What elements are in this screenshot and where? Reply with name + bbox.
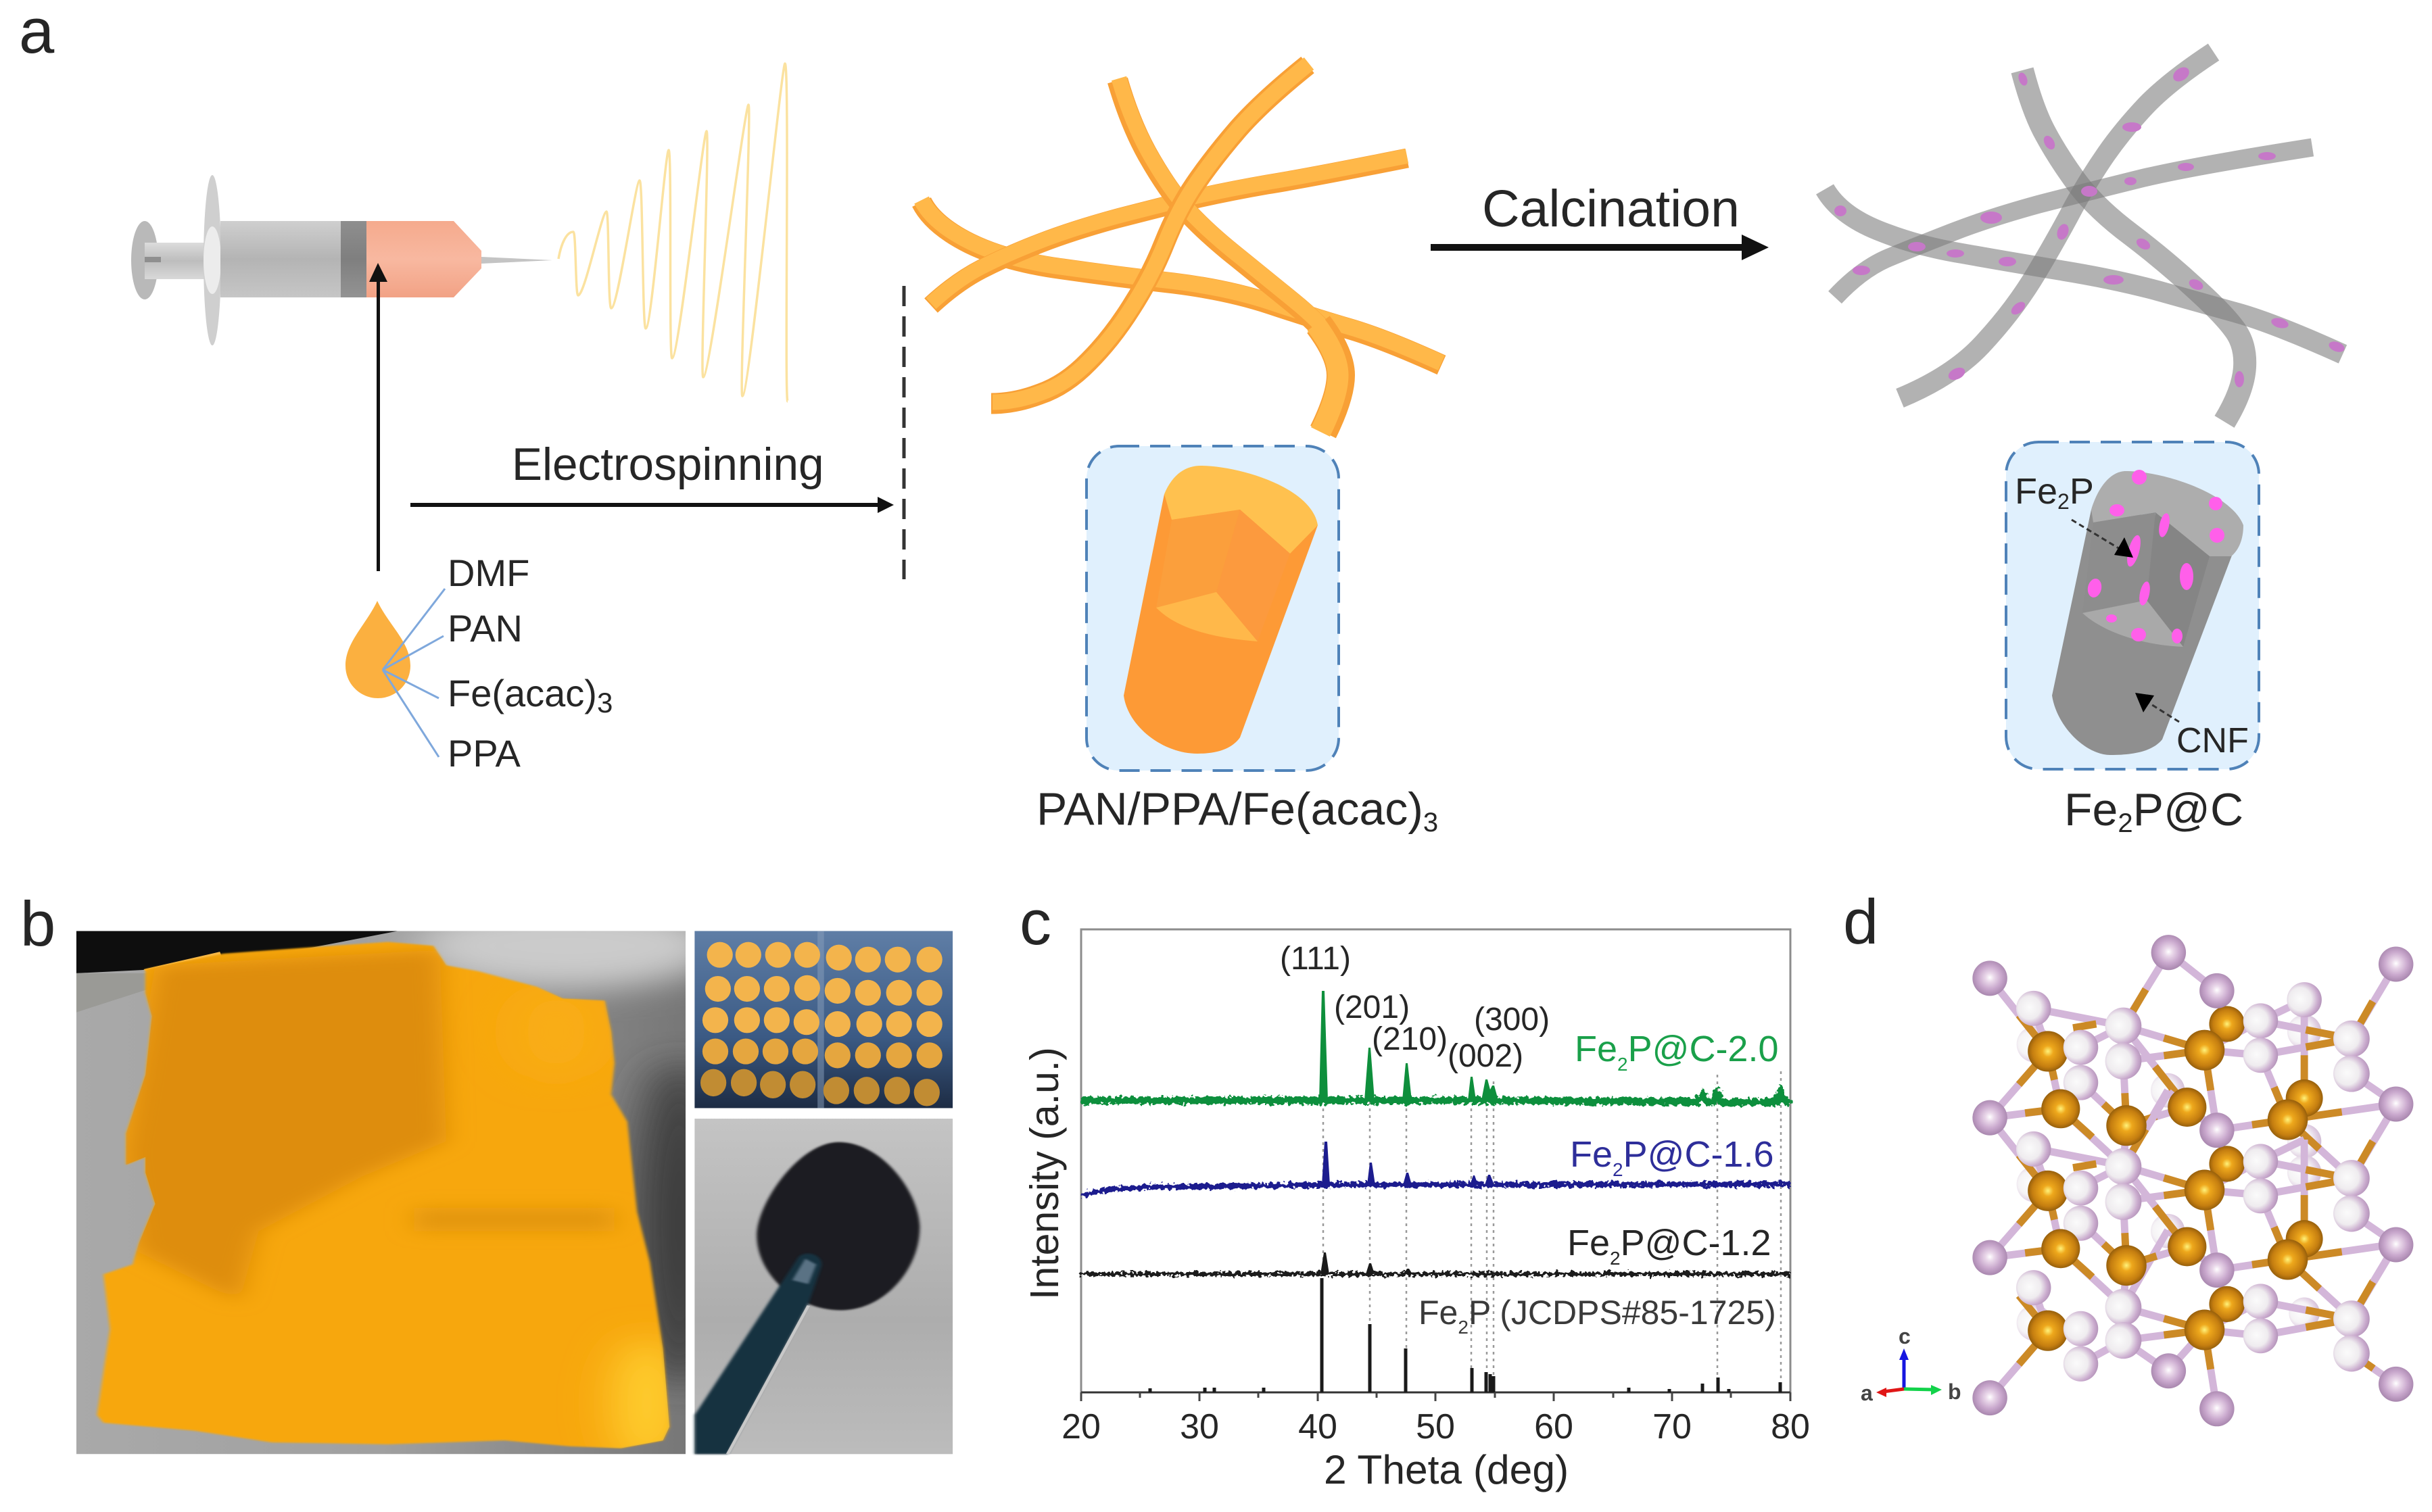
trace: Fe2P@C-2.0 green: [1081, 991, 1790, 1104]
label: DMF: DMF: [448, 552, 529, 594]
label: Calcination: Calcination: [1482, 180, 1740, 238]
reference label: P (JCDPS#85-1725): [1469, 1294, 1776, 1332]
series label: Fe2P@C-1.6: 2: [1613, 1159, 1623, 1180]
blue leader lines: [383, 589, 445, 757]
reference pattern bars: [1150, 1278, 1780, 1392]
arrow: solution to syringe: [369, 263, 387, 571]
x tick labels: 20: [1062, 1407, 1101, 1446]
dotted guide lines: [1323, 1054, 1781, 1382]
label: Fe2P inset: Fe: [2015, 471, 2057, 512]
x tick labels: 60: [1534, 1407, 1573, 1446]
series label: Fe2P@C-1.2: P@C-1.2: [1621, 1223, 1771, 1263]
chart frame and axis: [1081, 929, 1790, 1401]
label: PAN: PAN: [448, 607, 523, 650]
label: Fe2P@C: 2: [2118, 808, 2133, 838]
panel a: electrospinning schematic: [19, 0, 2346, 838]
panel label c: c: [1020, 887, 1051, 958]
wave: electrospun jet: [558, 64, 788, 401]
photos: [76, 903, 953, 1469]
photo: punched disks on blue background: [694, 931, 953, 1108]
x axis title: 2 Theta (deg): [1324, 1446, 1569, 1492]
crystal structure model: [1972, 935, 2413, 1426]
label: Fe2P@C: Fe: [2064, 784, 2118, 835]
arrow: electrospinning: [410, 497, 894, 513]
axis triad: [1861, 1324, 1961, 1405]
x tick labels: 80: [1771, 1407, 1810, 1446]
peak labels: [1280, 941, 1550, 1074]
arrow: to CNF: [2135, 693, 2179, 722]
series label: Fe2P@C-2.0: Fe: [1575, 1029, 1617, 1069]
peak labels: (210): [1372, 1021, 1448, 1057]
panel label d: d: [1843, 886, 1878, 957]
axis triad: b: [1948, 1380, 1961, 1404]
arrow: to Fe2P: [2072, 520, 2133, 558]
x tick labels: 40: [1298, 1407, 1337, 1446]
label: Fe2P inset: P: [2070, 471, 2094, 512]
panel b: photographs: [20, 888, 953, 1469]
reference label: Fe: [1418, 1294, 1458, 1332]
collector dashed line: [902, 286, 906, 579]
x tick labels: [1062, 1407, 1810, 1446]
label: Fe2P inset: 2: [2057, 489, 2070, 514]
series label: Fe2P@C-1.6: Fe: [1570, 1134, 1613, 1175]
icon: solution droplet: [345, 601, 410, 698]
label: CNF: CNF: [2176, 721, 2249, 760]
series label: Fe2P@C-2.0: P@C-2.0: [1628, 1029, 1778, 1069]
orange fibers: [922, 64, 1441, 432]
inset: Fe2P@C fiber cross-section: [2006, 442, 2259, 769]
peak labels: (300): [1474, 1002, 1550, 1038]
trace: Fe2P@C-1.6 blue: [1081, 1142, 1790, 1195]
y axis title: Intensity (a.u.): [1022, 1047, 1067, 1300]
grey carbon fibers with Fe2P: [1825, 52, 2346, 422]
label: PAN/PPA/Fe(acac)3: 3: [1423, 808, 1438, 837]
arrow: calcination: [1431, 235, 1769, 260]
peak labels: (111): [1280, 941, 1351, 977]
label: Fe(acac)3: Fe(acac): [448, 672, 597, 714]
panel c: XRD chart: [1020, 887, 1810, 1492]
series label: Fe2P@C-2.0: 2: [1617, 1054, 1628, 1075]
label: PPA: PPA: [448, 732, 521, 775]
label: Fe(acac)3: 3: [597, 687, 613, 718]
x tick labels: 70: [1652, 1407, 1692, 1446]
panel label b: b: [20, 888, 55, 959]
panel d: crystal structure: [1843, 886, 2413, 1426]
x tick labels: 30: [1180, 1407, 1219, 1446]
axis triad: a: [1861, 1381, 1873, 1405]
series label: Fe2P@C-1.6: P@C-1.6: [1623, 1134, 1774, 1175]
peak labels: (002): [1448, 1038, 1523, 1074]
icon: syringe: [131, 175, 552, 345]
reference label: 2: [1458, 1317, 1469, 1338]
series label: Fe2P@C-1.2: 2: [1610, 1248, 1621, 1269]
label: Electrospinning: Electrospinning: [512, 439, 824, 490]
label: PAN/PPA/Fe(acac)3: PAN/PPA/Fe(acac): [1036, 783, 1423, 835]
label: Fe2P@C: P@C: [2133, 784, 2243, 835]
peak labels: (201): [1334, 990, 1410, 1025]
series label: Fe2P@C-1.2: Fe: [1567, 1223, 1610, 1263]
axis triad: c: [1899, 1324, 1911, 1348]
photo: black carbonized disk with tweezers: [694, 1119, 953, 1454]
trace: Fe2P@C-1.2 black: [1081, 1252, 1790, 1274]
photo: orange electrospun membrane: [76, 931, 686, 1455]
inset: precursor fiber cross-section: [1087, 446, 1339, 771]
x tick labels: 50: [1416, 1407, 1455, 1446]
